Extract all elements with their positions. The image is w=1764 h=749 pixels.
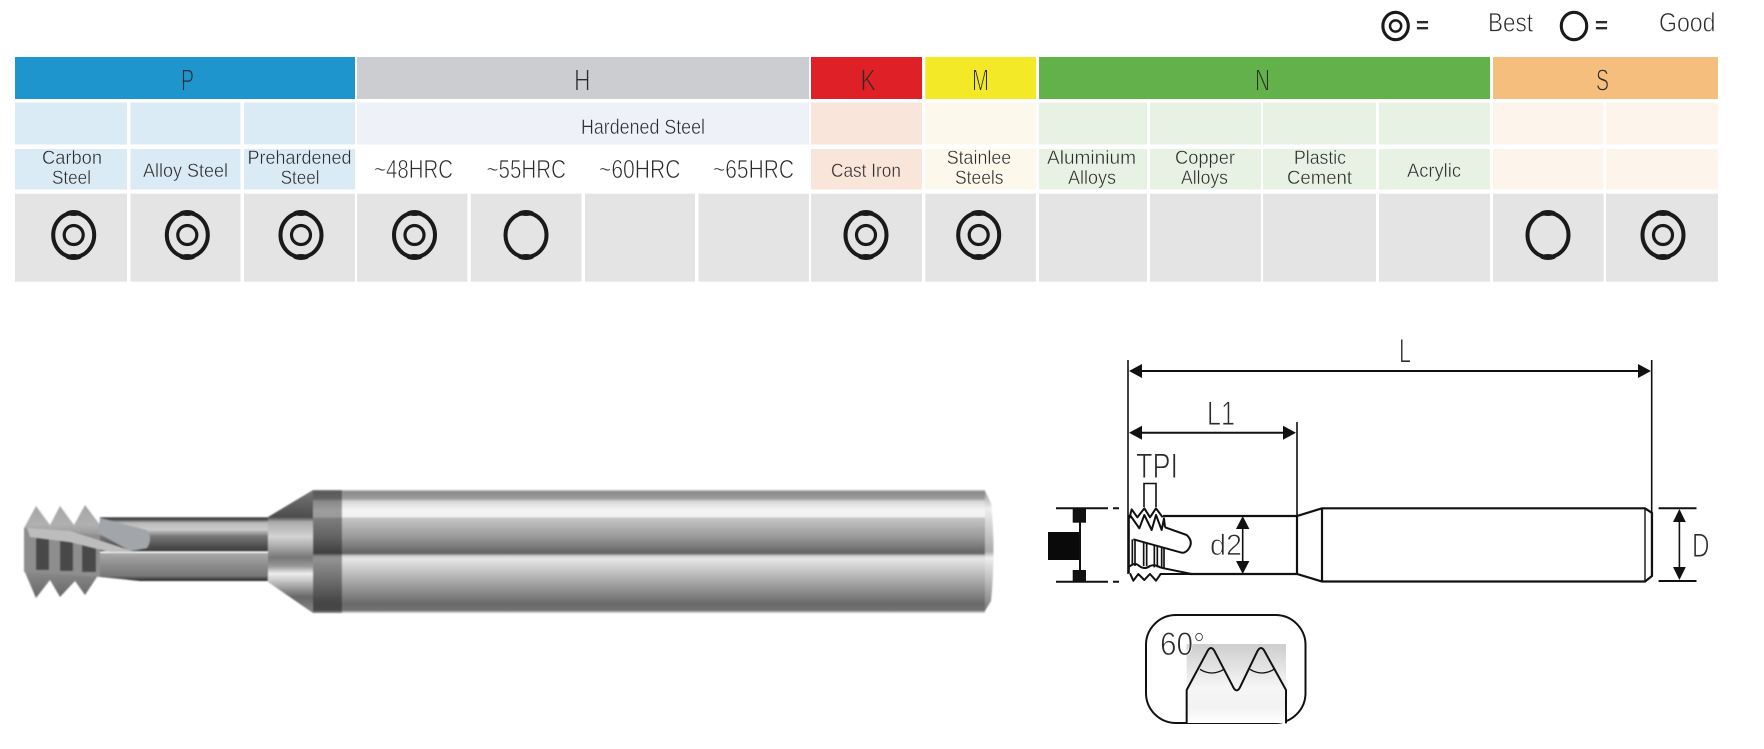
left diameter dimension — [1048, 508, 1119, 582]
header group N: N — [1255, 62, 1270, 98]
icon: S group best — [1642, 210, 1684, 260]
header group H: H — [574, 62, 590, 98]
material labels: Acrylic — [1407, 160, 1461, 182]
dark band on shank — [313, 490, 342, 613]
material labels: ~65HRC — [713, 154, 794, 184]
material compatibility table — [15, 57, 1718, 282]
header group P: P — [181, 62, 194, 98]
legend — [1383, 8, 1716, 40]
dimension d2 — [1210, 516, 1249, 574]
material labels: ~48HRC — [374, 154, 453, 184]
label: TPI with bracket — [1136, 447, 1178, 507]
lower neck — [97, 553, 268, 581]
material labels: ~55HRC — [486, 154, 566, 184]
row 4 rating cells — [15, 194, 1718, 282]
header group S — [1493, 57, 1718, 99]
header group N — [1039, 57, 1490, 99]
equals sign good: = — [1595, 13, 1608, 38]
label: good: Good — [1659, 8, 1716, 38]
material labels: Cast Iron — [831, 160, 901, 182]
equals sign best: = — [1416, 13, 1429, 38]
header group M: M — [972, 62, 989, 98]
dimension L1: L1 — [1207, 395, 1235, 433]
icon: best symbol — [1383, 12, 1408, 40]
dimension L: L — [1399, 333, 1411, 371]
upper neck — [100, 517, 268, 551]
material labels: Plastic — [1294, 147, 1346, 169]
tooth body — [24, 528, 100, 577]
blade — [98, 518, 150, 551]
dimension d2: d2 — [1210, 529, 1242, 562]
icon: cast iron best — [846, 210, 886, 260]
material labels: Alloys — [1181, 167, 1228, 189]
icon: stainless steels best — [958, 210, 999, 260]
header group K: K — [860, 62, 876, 98]
label: best: Best — [1488, 8, 1533, 38]
header group M — [925, 57, 1036, 99]
header group K — [811, 57, 922, 99]
extension lines — [1128, 360, 1652, 576]
label: TPI with bracket: TPI — [1136, 447, 1178, 486]
material labels: Cement — [1287, 167, 1353, 189]
dimension D: D — [1692, 527, 1710, 565]
icon: prehardened steel best — [280, 210, 322, 260]
material labels: Carbon — [42, 147, 102, 169]
product image: thread mill — [24, 490, 994, 613]
material labels — [42, 147, 1461, 189]
material labels: Steel — [281, 167, 320, 189]
technical drawing — [1048, 333, 1710, 723]
row 3 material cells — [15, 149, 1718, 190]
material labels: Alloy Steel — [143, 160, 228, 182]
panel: 60 degree thread profile: 60° — [1160, 626, 1205, 662]
flute stripes — [36, 538, 96, 572]
rating icons — [53, 210, 1684, 260]
icon: 48HRC best — [394, 210, 435, 260]
cutting teeth upper — [24, 505, 100, 545]
dimension D — [1659, 508, 1710, 581]
dimension L1 — [1129, 395, 1296, 440]
material labels: Stainlee — [947, 147, 1011, 169]
diagonal light swath — [27, 528, 135, 552]
tool outline — [1163, 508, 1652, 582]
material labels: Alloys — [1068, 167, 1116, 189]
label: hardened steel: Hardened Steel — [581, 115, 705, 139]
shank end chamfer — [978, 490, 994, 612]
material labels: ~60HRC — [599, 154, 680, 184]
shank — [313, 490, 985, 613]
row 2 subgroup cells — [15, 102, 1718, 144]
header group H — [357, 57, 809, 99]
header group P — [15, 57, 355, 99]
material labels: Steel — [52, 167, 91, 189]
material labels: Copper — [1175, 147, 1235, 169]
material labels: Steels — [955, 167, 1004, 189]
panel: 60 degree thread profile — [1146, 615, 1306, 723]
material labels: Prehardened — [248, 147, 352, 169]
dimension L — [1129, 333, 1651, 378]
cutting teeth lower — [24, 560, 97, 598]
icon: S group good — [1528, 210, 1568, 260]
material labels: Aluminium — [1047, 147, 1136, 169]
thread detail — [1129, 508, 1192, 581]
icon: carbon steel best — [53, 210, 94, 260]
icon: good symbol — [1561, 12, 1587, 40]
icon: alloy steel best — [167, 210, 208, 260]
header group S: S — [1596, 62, 1609, 98]
icon: 55HRC good — [506, 210, 546, 260]
cone — [268, 490, 313, 613]
